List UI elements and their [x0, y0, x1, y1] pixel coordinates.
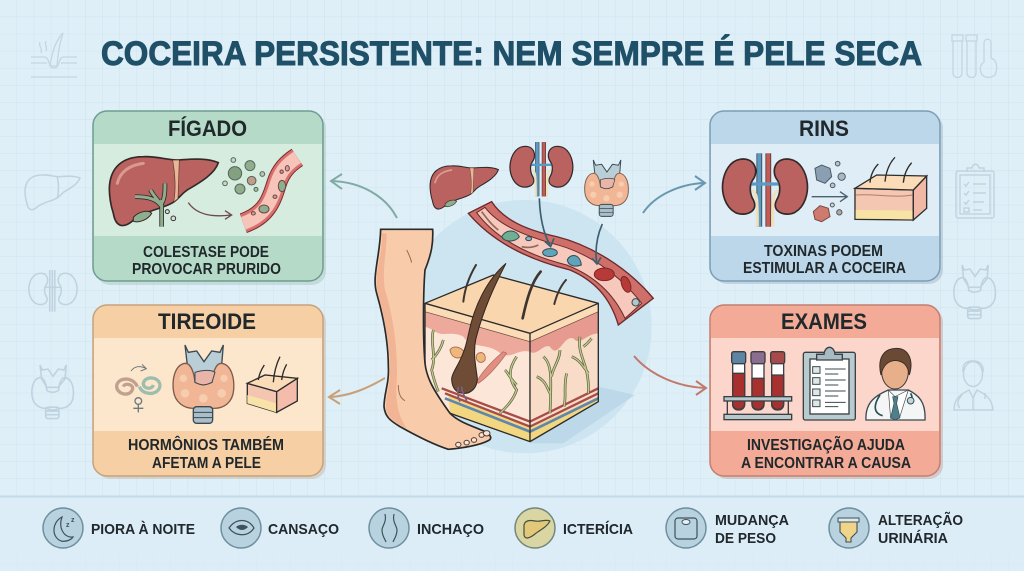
symptom: icterícia — [515, 508, 633, 548]
symptom: alteração urinária — [829, 508, 963, 548]
decorative icon: clipboard right — [956, 164, 994, 218]
arrow: center to exames — [634, 356, 706, 395]
symptom: mudança de peso: MUDANÇA — [715, 512, 789, 529]
blood vessel — [468, 202, 653, 325]
symptom: cansaço: CANSAÇO — [268, 521, 339, 538]
caption: exames: A ENCONTRAR A CAUSA — [741, 455, 911, 472]
panel: exames — [710, 305, 943, 479]
caption: tireoide — [128, 436, 284, 472]
panel: tireoide — [93, 305, 326, 479]
heading: tireoide: TIREOIDE — [158, 309, 256, 334]
symptom: piora à noite: PIORA À NOITE — [91, 521, 195, 538]
illustration: kidneys, toxins, skin — [722, 153, 927, 227]
glow circle — [398, 200, 652, 453]
central illustration: leg, skin block, vessel, organs — [375, 142, 653, 453]
small kidneys — [510, 142, 573, 196]
caption: exames: INVESTIGAÇÃO AJUDA — [747, 436, 905, 454]
decorative icon: thyroid left — [32, 365, 73, 419]
arrows into vessel — [539, 198, 602, 264]
title: COCEIRA PERSISTENTE: NEM SEMPRE É PELE SECA — [101, 35, 922, 73]
caption: exames — [741, 436, 911, 472]
caption: tireoide: AFETAM A PELE — [152, 455, 261, 472]
decorative icon: test tubes and finger — [952, 35, 997, 78]
small liver — [430, 166, 498, 209]
decorative icon: thyroid right — [954, 265, 995, 319]
decorative icon: doctor right — [954, 361, 993, 410]
illustration: hormones, thyroid, skin — [117, 345, 297, 423]
symptom: piora à noite: z — [71, 517, 75, 524]
symptom: mudança de peso: DE PESO — [715, 530, 776, 547]
shadow — [530, 387, 635, 443]
heading: exames: EXAMES — [781, 309, 867, 334]
caption: tireoide: HORMÔNIOS TAMBÉM — [128, 436, 284, 454]
panel: fígado — [93, 111, 326, 285]
hairs — [463, 265, 566, 318]
symptom: cansaço — [221, 508, 339, 548]
symptom: alteração urinária: URINÁRIA — [878, 530, 948, 547]
caption: fígado: COLESTASE PODE — [143, 244, 269, 261]
heading: fígado: FÍGADO — [168, 116, 247, 141]
small thyroid — [585, 160, 628, 216]
symptom: alteração urinária: ALTERAÇÃO — [878, 511, 963, 529]
panel: rins — [710, 111, 943, 284]
caption: fígado — [132, 244, 281, 278]
caption: rins: TOXINAS PODEM — [764, 243, 883, 260]
symptom: inchaço — [369, 508, 484, 548]
illustration: tubes, clipboard, doctor — [724, 347, 925, 420]
symptom: piora à noite — [43, 508, 195, 548]
caption: fígado: PROVOCAR PRURIDO — [132, 261, 281, 278]
decorative icon: liver left — [25, 175, 80, 210]
leg — [375, 229, 491, 449]
decorative icon: hair follicle — [31, 33, 77, 77]
caption: rins: ESTIMULAR A COCEIRA — [743, 260, 906, 277]
symptom: icterícia: ICTERÍCIA — [563, 521, 633, 538]
symptom: mudança de peso — [666, 508, 789, 548]
symptom: piora à noite: z — [66, 522, 70, 529]
skin block — [425, 275, 598, 442]
hair follicle — [452, 263, 506, 393]
arrow: center to tireoide — [329, 378, 385, 404]
caption: rins — [743, 243, 906, 277]
decorative icon: kidneys left — [29, 270, 77, 312]
illustration: liver to bloodstream — [109, 157, 297, 227]
arrow: center to rins — [643, 176, 705, 213]
heading: rins: RINS — [799, 116, 849, 141]
symptom: inchaço: INCHAÇO — [417, 521, 484, 538]
arrow: center to fígado — [331, 174, 397, 218]
